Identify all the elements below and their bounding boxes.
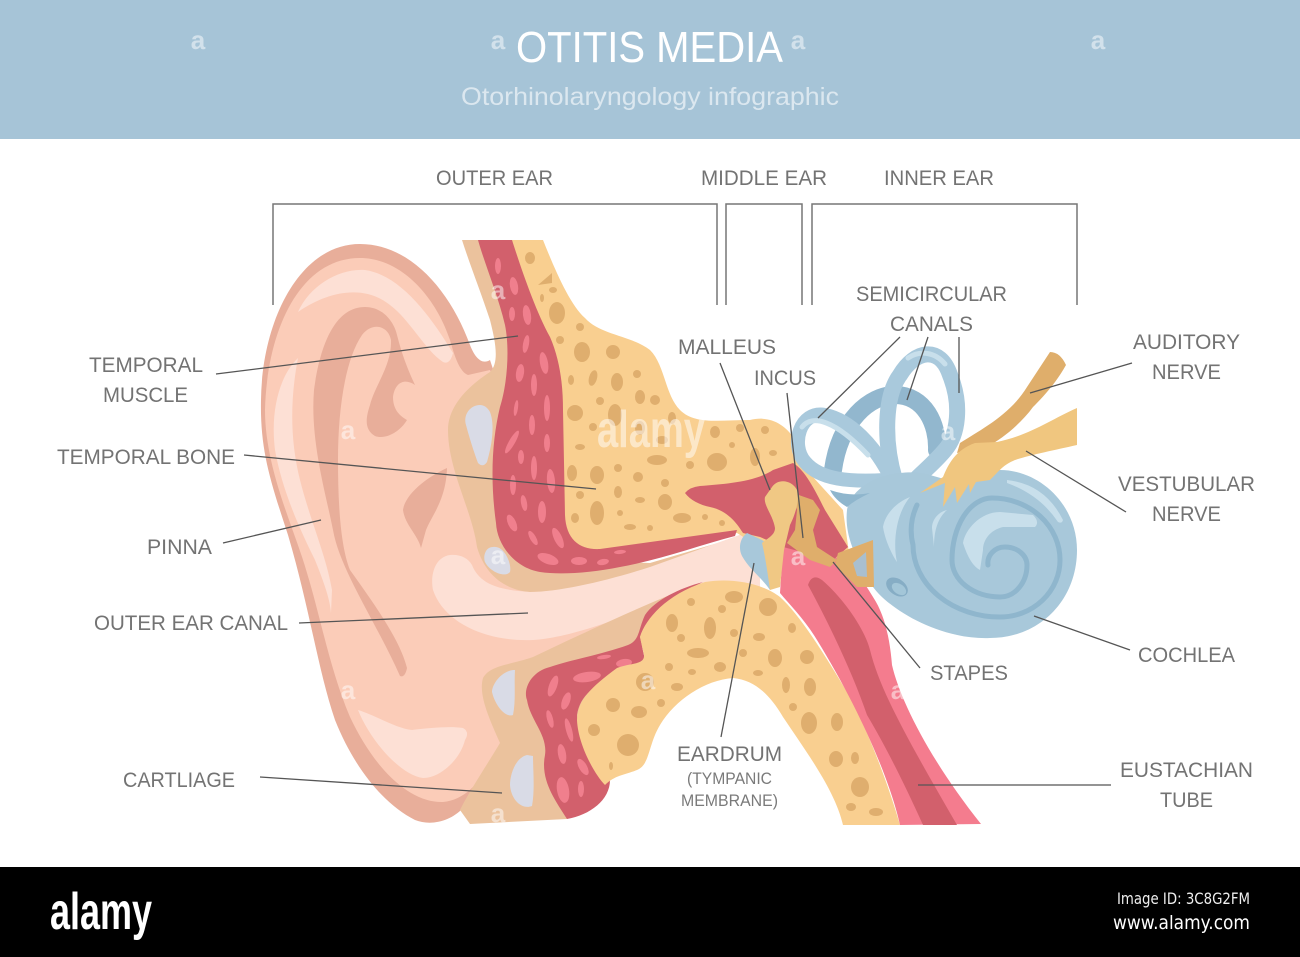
- labels: CANALS: [890, 313, 973, 336]
- section headings: OUTER EAR: [436, 167, 553, 190]
- pinna outer rim: [261, 244, 510, 823]
- labels: VESTUBULAR: [1118, 473, 1255, 496]
- watermark: a: [791, 25, 806, 55]
- vestibule shadow: [830, 490, 870, 507]
- watermark: a: [491, 798, 506, 828]
- illustration: pinna: [261, 244, 640, 823]
- outer ear canal: [432, 533, 760, 640]
- cochlea highlights: [883, 480, 1063, 570]
- upper helix highlight: [298, 270, 453, 363]
- posterior canal: [833, 395, 937, 470]
- tissue: lower tan layer: [460, 583, 700, 824]
- tube lumen: [808, 577, 957, 825]
- tissue: upper tan layer: [448, 240, 745, 592]
- temporal muscle, lower: [526, 582, 703, 819]
- watermark: a: [641, 665, 656, 695]
- watermark: a: [941, 416, 956, 446]
- malleus: [762, 481, 798, 590]
- watermark: a: [191, 25, 206, 55]
- cartilage pieces: [465, 405, 534, 807]
- pinna inner body: [265, 258, 640, 802]
- eardrum: [740, 533, 775, 590]
- watermark: a: [341, 675, 356, 705]
- cochlea spiral: [911, 498, 1060, 617]
- temporal bone, upper: [510, 240, 850, 560]
- labels: SEMICIRCULAR: [856, 283, 1007, 306]
- leader lines: [216, 336, 1132, 793]
- left helix highlight: [274, 358, 332, 613]
- watermark: a: [491, 275, 506, 305]
- watermark: a: [791, 541, 806, 571]
- section headings: INNER EAR: [884, 167, 994, 190]
- labels: NERVE: [1152, 361, 1221, 384]
- watermark: alamy: [597, 401, 705, 459]
- labels: OUTER EAR CANAL: [94, 612, 288, 635]
- footer bar: [0, 867, 1300, 957]
- labels: MALLEUS: [678, 336, 776, 359]
- labels: INCUS: [754, 367, 816, 390]
- labels: [57, 283, 1255, 812]
- labels: TEMPORAL: [89, 354, 203, 377]
- canal highlights: [802, 421, 868, 455]
- vestibular nerve: [920, 408, 1077, 507]
- title: OTITIS MEDIA: [516, 23, 784, 72]
- temporal bone, lower: [577, 580, 900, 825]
- labels: STAPES: [930, 662, 1008, 685]
- watermark: a: [891, 675, 906, 705]
- labels: MEMBRANE): [681, 792, 778, 810]
- auditory nerve: [957, 352, 1066, 453]
- tragus fold: [403, 468, 447, 548]
- round window: [883, 574, 911, 600]
- labels: COCHLEA: [1138, 644, 1235, 667]
- header banner: [0, 0, 1300, 139]
- labels: EARDRUM: [677, 743, 782, 766]
- labels: TEMPORAL BONE: [57, 446, 235, 469]
- watermark: a: [491, 25, 506, 55]
- watermark: [191, 25, 1106, 828]
- superior canal: [887, 354, 957, 480]
- labels: (TYMPANIC: [687, 770, 772, 788]
- vestibule and cochlea body: [847, 470, 1077, 638]
- labels: PINNA: [147, 536, 212, 559]
- subtitle: Otorhinolaryngology infographic: [461, 83, 839, 111]
- section headings: MIDDLE EAR: [701, 167, 827, 190]
- section headings: [436, 167, 994, 190]
- muscle fibres, lower: [545, 654, 632, 804]
- footer logo: alamy: [50, 883, 152, 941]
- incus: [787, 493, 837, 567]
- stapes: [835, 540, 874, 587]
- labels: TUBE: [1160, 789, 1213, 812]
- muscle fibres, upper: [495, 258, 626, 567]
- watermark: a: [341, 415, 356, 445]
- section brackets: [273, 204, 1077, 305]
- website: www.alamy.com: [1113, 912, 1250, 934]
- labels: MUSCLE: [103, 384, 188, 407]
- inner ear: semicircular canals: [798, 353, 957, 481]
- bone pores: [525, 252, 883, 816]
- antihelix fold: [313, 307, 415, 676]
- eustachian tube: [780, 547, 981, 825]
- watermark: a: [491, 540, 506, 570]
- labels: CARTLIAGE: [123, 769, 235, 792]
- temporal muscle, upper: [478, 240, 737, 573]
- lobe highlight: [358, 710, 467, 778]
- labels: NERVE: [1152, 503, 1221, 526]
- lateral canal: [798, 415, 892, 481]
- watermark: a: [1091, 25, 1106, 55]
- middle ear cavity: [685, 463, 848, 560]
- labels: AUDITORY: [1133, 331, 1240, 354]
- image id: Image ID: 3C8G2FM: [1117, 889, 1250, 908]
- labels: EUSTACHIAN: [1120, 759, 1253, 782]
